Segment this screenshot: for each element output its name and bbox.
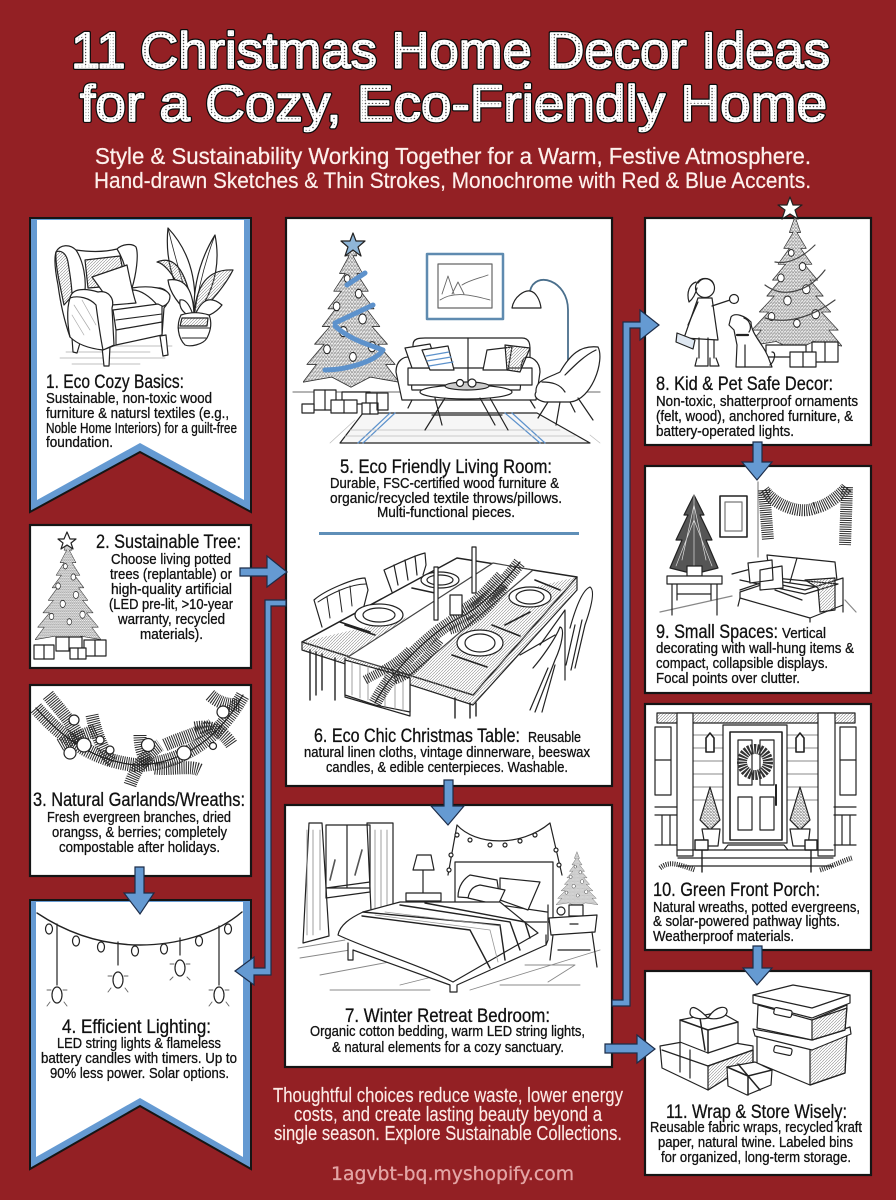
description: Multi-functional pieces. bbox=[377, 505, 515, 521]
description: paper, natural twine. Labeled bins bbox=[658, 1135, 853, 1151]
description: Reusable fabric wraps, recycled kraft bbox=[650, 1120, 862, 1136]
closing message: Thoughtful choices reduce waste, lower energy bbox=[273, 1085, 623, 1107]
description bbox=[656, 394, 858, 440]
icon: wrapped gifts bbox=[660, 1007, 772, 1095]
arrow: bedroom to wrap and store bbox=[605, 1035, 655, 1063]
description: Durable, FSC-certified wood furniture & bbox=[330, 476, 559, 492]
icon: armchair bbox=[55, 245, 172, 366]
description: compostable after holidays. bbox=[59, 840, 220, 856]
heading: Reusable bbox=[528, 730, 581, 746]
description: Organic cotton bedding, warm LED string lights, bbox=[310, 1024, 585, 1040]
description: natural linen cloths, vintage dinnerware, beeswax bbox=[304, 745, 591, 761]
description: for organized, long-term storage. bbox=[661, 1150, 851, 1166]
heading and description: decorating with wall-hung items & bbox=[656, 641, 854, 657]
icon: storage bins bbox=[753, 985, 851, 1085]
website url: 1agvbt-bq.myshopify.com bbox=[331, 1163, 574, 1185]
description: Noble Home Interiors) for a guilt-free bbox=[46, 421, 237, 437]
icon: dog bbox=[729, 315, 775, 367]
panel 11: wrap and store wisely bbox=[645, 971, 871, 1175]
icon: garland bbox=[36, 695, 243, 785]
description bbox=[650, 1120, 862, 1166]
panel 3: natural garlands bbox=[30, 685, 251, 876]
heading and description bbox=[656, 621, 854, 687]
icon: living room scene bbox=[293, 233, 600, 443]
description: (LED pre-lit, >10-year bbox=[109, 597, 233, 613]
subtitle: Hand-drawn Sketches & Thin Strokes, Monochrome with Red & Blue Accents. bbox=[94, 168, 811, 193]
description: Fresh evergreen branches, dried bbox=[47, 810, 231, 826]
closing message: costs, and create lasting beauty beyond a bbox=[294, 1104, 603, 1126]
description: materials). bbox=[140, 627, 203, 643]
heading and description: Vertical bbox=[782, 626, 826, 642]
title: 11 Christmas Home Decor Ideas bbox=[71, 22, 830, 79]
arrow: garlands to lighting bbox=[124, 867, 154, 914]
arrow: table connector to lighting bbox=[235, 600, 286, 985]
description: 90% less power. Solar options. bbox=[50, 1066, 229, 1082]
heading and description: 9. Small Spaces: bbox=[656, 621, 778, 643]
description: Sustainable, non-toxic wood bbox=[46, 391, 212, 407]
description: & natural elements for a cozy sanctuary. bbox=[332, 1040, 564, 1056]
description bbox=[304, 745, 591, 776]
icon: tree with star bbox=[748, 197, 842, 367]
panel 9: small spaces bbox=[645, 466, 871, 693]
description bbox=[310, 1024, 585, 1056]
icon: bedroom scene bbox=[298, 823, 600, 992]
description: battery candles with timers. Up to bbox=[41, 1051, 237, 1067]
panel 8: kid and pet safe decor bbox=[645, 197, 871, 445]
description: furniture & natursl textiles (e.g., bbox=[46, 406, 229, 422]
title: 11 Christmas Home Decor Ideas bbox=[71, 22, 830, 79]
arrow: table to bedroom bbox=[431, 780, 464, 825]
description: organic/recycled textile throws/pillows. bbox=[330, 491, 562, 507]
description bbox=[47, 810, 231, 856]
panel 10: green front porch bbox=[645, 704, 871, 950]
arrow: tree to living room bbox=[240, 556, 287, 587]
description: trees (replantable) or bbox=[110, 567, 232, 583]
description: battery-operated lights. bbox=[656, 424, 794, 440]
heading: 10. Green Front Porch: bbox=[653, 879, 820, 901]
heading: 7. Winter Retreat Bedroom: bbox=[345, 1005, 550, 1027]
description: & solar-powered pathway lights. bbox=[653, 914, 840, 930]
description: Non-toxic, shatterproof ornaments bbox=[656, 394, 858, 410]
title: for a Cozy, Eco-Friendly Home bbox=[80, 75, 827, 132]
subtitle bbox=[94, 143, 811, 193]
panel 2: sustainable tree bbox=[30, 525, 251, 668]
description bbox=[41, 1036, 237, 1082]
panel 7: winter retreat bedroom bbox=[285, 805, 612, 1067]
closing message bbox=[273, 1085, 623, 1145]
arrow: porch to wrap and store bbox=[743, 946, 772, 985]
arrow: bedroom to kid and pet safe decor bbox=[612, 310, 659, 1006]
closing message: single season. Explore Sustainable Collections. bbox=[274, 1123, 622, 1145]
description bbox=[330, 476, 562, 521]
icon: christmas tree with gifts bbox=[34, 532, 106, 659]
arrow: kid safe to small spaces bbox=[742, 442, 772, 480]
panel 5 and 6: living room and table bbox=[286, 218, 612, 786]
description bbox=[653, 900, 860, 945]
icon: string lights bbox=[37, 912, 242, 1006]
panel 4: efficient lighting bbox=[30, 900, 251, 1169]
heading: 5. Eco Friendly Living Room: bbox=[340, 456, 552, 478]
icon: girl with ornament bbox=[676, 278, 738, 366]
description: LED string lights & flameless bbox=[57, 1036, 221, 1052]
heading: 4. Efficient Lighting: bbox=[62, 1016, 211, 1038]
heading and description: Focal points over clutter. bbox=[656, 671, 800, 687]
description: Weatherproof materials. bbox=[653, 929, 794, 945]
description bbox=[46, 391, 237, 451]
heading: 11. Wrap & Store Wisely: bbox=[666, 1101, 847, 1123]
description: (felt, wood), anchored furniture, & bbox=[656, 409, 853, 425]
title bbox=[71, 22, 830, 132]
icon: front porch with wreath bbox=[655, 713, 856, 872]
description: Choose living potted bbox=[111, 552, 231, 568]
description bbox=[109, 552, 233, 643]
icon: dining table bbox=[302, 547, 592, 718]
description: Natural wreaths, potted evergreens, bbox=[653, 900, 860, 916]
title: for a Cozy, Eco-Friendly Home bbox=[80, 75, 827, 132]
heading: 2. Sustainable Tree: bbox=[96, 531, 241, 553]
heading: 8. Kid & Pet Safe Decor: bbox=[656, 373, 833, 395]
description: warranty, recycled bbox=[117, 612, 225, 628]
panel 1: eco cozy basics bbox=[30, 218, 251, 512]
description: foundation. bbox=[46, 435, 113, 451]
description: orangss, & berries; completely bbox=[52, 825, 228, 841]
heading: 3. Natural Garlands/Wreaths: bbox=[33, 789, 245, 811]
heading: 6. Eco Chic Christmas Table: bbox=[314, 725, 520, 747]
subtitle: Style & Sustainability Working Together for a Warm, Festive Atmosphere. bbox=[95, 143, 811, 169]
icon: potted plant bbox=[157, 228, 233, 346]
heading and description: compact, collapsible displays. bbox=[656, 656, 828, 672]
description: high-quality artificial bbox=[111, 582, 232, 598]
description: candles, & edible centerpieces. Washable. bbox=[326, 760, 568, 776]
heading: 1. Eco Cozy Basics: bbox=[46, 371, 184, 393]
icon: small space room bbox=[660, 482, 856, 622]
